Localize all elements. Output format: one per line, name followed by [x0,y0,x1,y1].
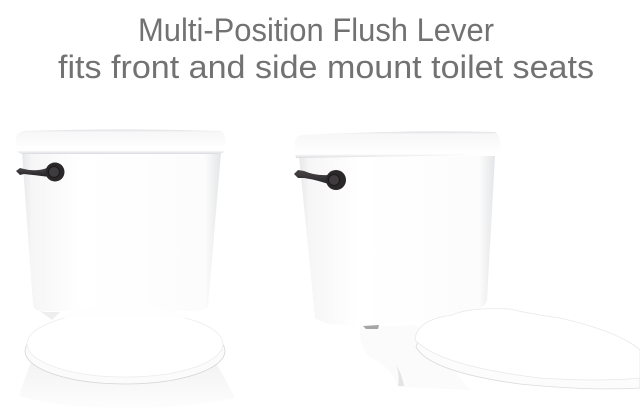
title [58,12,594,85]
tank, front [22,153,221,311]
tank lid, side [295,131,500,158]
front view toilet [16,130,235,408]
toilet base, front [19,357,235,408]
side view toilet [294,131,640,390]
toilet seat, side [415,309,640,389]
toilet pedestal, side [360,325,470,390]
tank lid, front [16,130,225,154]
title: fits front and side mount toilet seats [58,49,594,85]
toilet seat, front [25,307,225,384]
title: Multi-Position Flush Lever [138,12,494,48]
tank, side [299,156,495,325]
flush lever, side [294,170,346,190]
flush lever, front [16,162,64,182]
